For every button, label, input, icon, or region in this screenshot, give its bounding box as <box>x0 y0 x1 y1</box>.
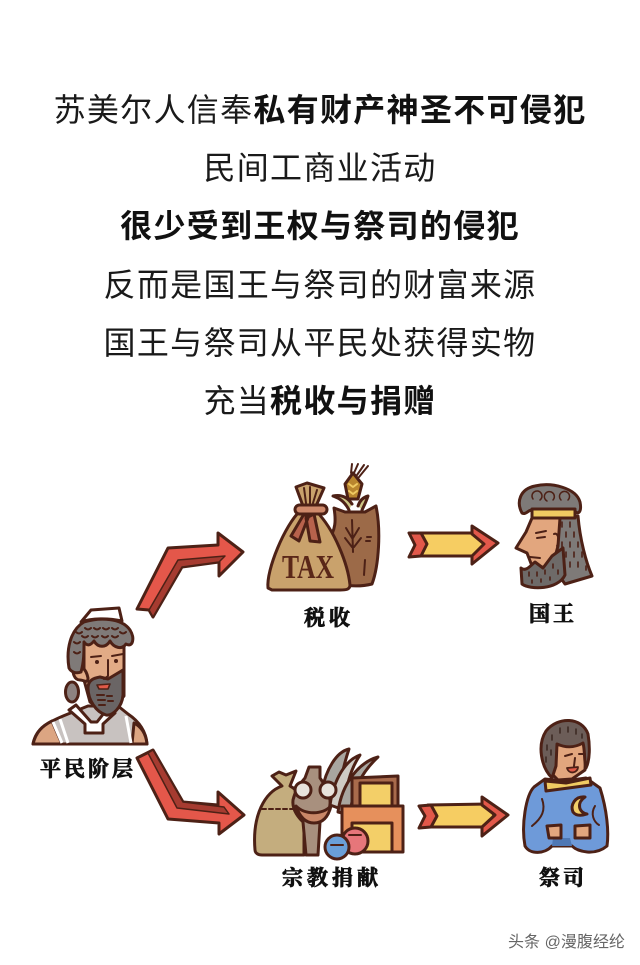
tax lettering: TAX <box>282 549 334 586</box>
heading text block: 苏美尔人信奉私有财产神圣不可侵犯 <box>54 92 586 128</box>
heading text block: 国王与祭司从平民处获得实物 <box>104 325 536 361</box>
heading text block: 很少受到王权与祭司的侵犯 <box>120 208 520 244</box>
heading text block: 民间工商业活动 <box>203 150 437 186</box>
heading text block: 充当税收与捐赠 <box>203 383 437 419</box>
icon: priest <box>524 720 608 852</box>
heading text block <box>54 92 586 419</box>
icon: king <box>516 485 592 588</box>
arrow: commoner to religious offerings <box>137 750 244 834</box>
icon: commoner figure <box>33 608 147 744</box>
label: religious offerings: 宗教捐献 <box>282 866 382 890</box>
watermark: 头条 @漫腹经纶 <box>508 933 625 951</box>
icon: religious offerings <box>255 749 403 859</box>
label: taxation: 税收 <box>304 606 354 630</box>
label: commoner class: 平民阶层 <box>40 757 136 781</box>
icon: tax sacks and wheat <box>268 464 379 590</box>
label: priest: 祭司 <box>539 866 587 890</box>
arrow: tax to king <box>409 526 498 564</box>
heading text block: 反而是国王与祭司的财富来源 <box>104 267 536 303</box>
arrow: offerings to priest <box>419 797 508 836</box>
label: king: 国王 <box>529 602 577 626</box>
arrow: commoner to tax <box>137 533 243 617</box>
